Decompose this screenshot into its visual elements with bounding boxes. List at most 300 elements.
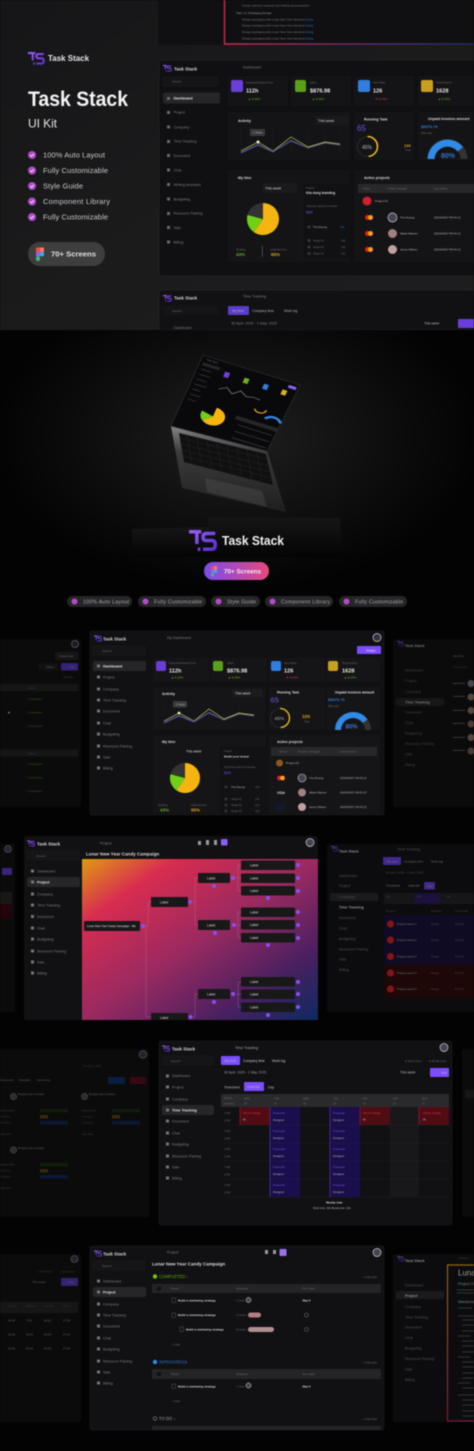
tabs: ● Break time	[429, 1059, 446, 1063]
badge: 70+ screens gradient	[204, 562, 269, 580]
mind map: Label	[207, 992, 216, 996]
sidebar: Search	[172, 80, 182, 84]
tabs: Calendar	[247, 1085, 261, 1089]
icon: logo	[28, 53, 44, 64]
card: active projects: Wade Warren	[400, 232, 418, 236]
card: my time pie: Target 02	[313, 245, 324, 249]
panel: task list screen left (dimmed): Filters	[46, 665, 54, 669]
sidebar: Budgeting	[103, 732, 120, 736]
panel: hero dashboard screen: Dashboard	[243, 66, 261, 70]
panel: task list screen left (dimmed): Completed	[28, 697, 42, 701]
sidebar: Resource Planing	[103, 744, 132, 748]
tabs: Company time	[243, 1059, 265, 1063]
panel: top document screen: Design packaging with Lunar New Year elements Doing	[242, 30, 314, 34]
card: my time pie: 14h	[341, 238, 346, 242]
panel: approvals screen left (dimmed): Company	[0, 1120, 12, 1124]
calendar grid: Financial	[333, 1183, 345, 1187]
sidebar: Dashboard	[103, 664, 123, 668]
panel: day schedule screen right (dimmed): Design	[431, 938, 440, 942]
panel: timesheet screen left (dimmed): TUE 24	[8, 1304, 17, 1308]
panel: document screen right (dimmed): Time Tracking	[405, 1316, 428, 1320]
panel: timesheet screen left (dimmed): ● Work time	[38, 1270, 52, 1274]
panel: day schedule screen right (dimmed): Project name 3	[397, 954, 417, 958]
calendar grid: Off for holiday	[363, 1111, 381, 1115]
badge: 70+ screens gradient: 70+ Screens	[224, 568, 261, 575]
task group: to do	[152, 1416, 381, 1430]
sidebar: Billing	[103, 1382, 113, 1386]
panel: hero time tracking screen: My time	[232, 309, 244, 313]
panel: approvals screen left (dimmed): Responsible	[0, 1162, 15, 1166]
calendar grid: Designer	[273, 1172, 284, 1176]
card: active projects: 2024/03/27 09:43:12	[340, 805, 367, 809]
sidebar: Budgeting	[37, 938, 54, 942]
card: my time pie: Kilo dung branding	[306, 191, 335, 195]
calendar grid: 7 AM	[224, 1183, 230, 1187]
panel: task list screen main	[90, 1246, 384, 1430]
calendar grid: Off for holiday	[423, 1111, 441, 1115]
sidebar: Task Stack	[103, 1252, 127, 1256]
card: running task: Total	[405, 148, 411, 152]
card: active projects: Project manager	[298, 750, 320, 754]
sidebar: Billing	[37, 972, 47, 976]
calendar grid: 7 AM	[224, 1111, 230, 1115]
task group: completed: May 6	[302, 1298, 311, 1302]
card: unpaid invoices gauge: 98% paid	[421, 131, 432, 135]
card: active projects: Project manager	[388, 186, 407, 190]
feature list: Fully Customizable	[43, 166, 108, 175]
panel: calendar screen right (dimmed): Choose task	[453, 665, 468, 669]
panel: task list screen left (dimmed): Status	[28, 686, 36, 690]
sidebar: Sale	[37, 960, 44, 964]
sidebar: Resource Planing	[172, 1154, 201, 1158]
stat cards: ▲ 8.25%	[438, 97, 451, 101]
panel: approvals screen left (dimmed): Document	[0, 1078, 14, 1082]
panel: day schedule screen right (dimmed): Document	[339, 916, 356, 920]
card: my time pie: Target 01	[231, 797, 242, 801]
calendar grid: Financial	[273, 1183, 285, 1187]
card: activity chart: 3 Tasks	[176, 702, 186, 706]
mind map: Label	[250, 980, 259, 984]
card: running task: Running Task	[364, 118, 388, 122]
panel: day schedule screen right (dimmed): Time Tracking	[397, 848, 420, 852]
card: activity chart: This week	[318, 119, 334, 123]
stat cards: $876.98	[227, 668, 247, 674]
sidebar: Company	[172, 1098, 188, 1102]
calendar grid: 2 PM	[224, 1118, 230, 1122]
calendar grid: Financial	[333, 1129, 345, 1133]
stat cards: 126	[284, 668, 293, 674]
card: my time pie: Target 03	[313, 252, 324, 256]
sidebar: Chat	[37, 926, 45, 930]
panel: document screen right (dimmed): Resource Planing	[405, 1357, 434, 1361]
panel: day schedule screen right (dimmed): Billing	[339, 968, 349, 972]
panel: hero time tracking screen: 30 April, 2025 - 1 May, 2025	[231, 322, 277, 326]
calendar grid: 31	[393, 1102, 396, 1106]
mind map: Label	[250, 889, 259, 893]
mind map: Label	[250, 923, 259, 927]
panel: document screen right (dimmed): Project	[459, 1256, 469, 1260]
sidebar	[93, 1252, 146, 1386]
panel: top document screen: Candy selection research and tasting documentaries	[242, 4, 310, 8]
panel: hero banner	[0, 0, 474, 330]
sidebar: Dashboard	[37, 870, 55, 874]
panel: day schedule screen right (dimmed): Project name 5	[397, 987, 417, 991]
calendar grid: 29	[333, 1102, 336, 1106]
task group: to do: + Add task	[363, 1417, 378, 1421]
card: active projects: Project 01	[286, 761, 299, 765]
calendar grid: Designer	[273, 1118, 284, 1122]
panel: calendar screen right (dimmed): Chat	[405, 721, 413, 725]
calendar grid: 2 PM	[224, 1172, 230, 1176]
calendar grid: Designer	[273, 1136, 284, 1140]
stat cards: ▲ 8.25%	[344, 676, 357, 680]
panel: mind map screen: Project	[100, 842, 111, 846]
document outline	[448, 1265, 474, 1421]
panel: approvals screen left (dimmed): Responsible	[82, 1108, 97, 1112]
task group: in progress: Name	[171, 1372, 179, 1376]
stat cards: 126	[373, 88, 382, 94]
card: my time pie: Total time spent by minutes	[224, 765, 256, 769]
calendar grid: 7 AM	[224, 1165, 230, 1169]
stat cards: ▼ 8.25%	[286, 676, 299, 680]
card: my time pie: Target 03	[231, 809, 242, 813]
card: active projects: 2024/03/27 09:43:12	[340, 776, 367, 780]
feature list: Style Guide	[43, 182, 83, 191]
panel: day schedule screen right (dimmed): Mon	[417, 894, 423, 898]
panel: timesheet screen left (dimmed): 07:00	[63, 1318, 70, 1322]
sidebar: Task Stack	[37, 842, 61, 846]
feature chips: 100% Auto Layout	[83, 600, 130, 606]
sidebar: Resource Planing	[174, 212, 203, 216]
feature chips: Fully Customizable	[355, 600, 403, 606]
task group: in progress: 1 User	[236, 1384, 245, 1388]
sidebar: Document	[174, 154, 190, 158]
panel: day schedule screen right (dimmed): Budgeting	[339, 937, 356, 941]
mind map: Label	[160, 900, 169, 904]
panel: approvals screen left (dimmed): Budget plan created	[18, 1146, 44, 1150]
stat cards: Total Projects	[436, 80, 452, 84]
sidebar: Budgeting	[172, 1142, 189, 1146]
panel: calendar screen right (dimmed): Resource Planing	[405, 742, 434, 746]
panel: day schedule screen right (dimmed): Calendar	[408, 884, 420, 888]
mind map: Label	[250, 864, 259, 868]
sidebar: Time Tracking	[172, 1108, 197, 1112]
panel: day schedule screen right (dimmed): 8:00 am	[455, 987, 464, 991]
card: unpaid invoices gauge: $6076.76	[421, 124, 438, 129]
sidebar: Chat	[103, 1336, 111, 1340]
card: unpaid invoices gauge	[327, 687, 380, 730]
panel: timesheet screen left (dimmed): WED 25	[26, 1304, 36, 1308]
panel: dashboard screen main: My Dashboard	[167, 636, 191, 640]
sidebar: Chat	[172, 1132, 180, 1136]
calendar grid: 2 PM	[224, 1154, 230, 1158]
badge: 70+ screens: 70+ Screens	[51, 250, 96, 259]
calendar grid: Off for holiday	[243, 1111, 261, 1115]
card: activity chart: This week	[235, 692, 251, 696]
panel: approvals screen left (dimmed): Budget plan created	[18, 1092, 44, 1096]
panel: laptop hero scene	[0, 330, 474, 625]
task group: in progress: Build a marketing strategy	[178, 1384, 216, 1388]
panel: day schedule screen right (dimmed): 8:00 am	[455, 971, 464, 975]
view switcher icons	[198, 839, 228, 846]
card: my time pie: Working	[236, 248, 246, 252]
sidebar: Task Stack	[172, 1046, 196, 1052]
heading: Task Stack	[28, 88, 128, 111]
stat cards: ▼ 8.25%	[375, 97, 388, 101]
stat cards: Sales	[310, 80, 317, 84]
calendar grid: FRI	[363, 1096, 367, 1100]
panel: day schedule screen right (dimmed): Timesheet	[386, 884, 400, 888]
sidebar: Time Tracking	[174, 140, 197, 144]
panel: document screen right (dimmed): Budgeting	[405, 1346, 422, 1350]
panel: hero time tracking screen: Dashboard	[174, 326, 192, 330]
panel: hero dashboard screen: Task Stack	[174, 66, 198, 72]
feature chips: Component Library	[281, 600, 330, 606]
task group: completed: COMPLETED	[159, 1274, 185, 1279]
panel: day schedule screen right (dimmed): Sale	[339, 958, 346, 962]
card: activity chart	[153, 687, 265, 730]
panel: task list screen left (dimmed): Completed	[28, 789, 42, 793]
card: active projects: Thu Duong	[400, 216, 415, 220]
calendar grid: Designer	[273, 1154, 284, 1158]
panel: document screen right (dimmed): Task Stack	[405, 1259, 425, 1263]
panel: right sliver screen (dimmed)	[462, 1049, 474, 1217]
sidebar: Company	[103, 688, 119, 692]
stat cards: Expected Worked Time	[246, 80, 273, 84]
card: my time pie: 14h	[340, 225, 345, 229]
panel: task list screen left (dimmed): Assign task	[59, 654, 74, 658]
sidebar: Project	[103, 1290, 116, 1294]
brand name: Task Stack	[222, 533, 285, 548]
panel: top document screen	[158, 0, 474, 45]
card: my time pie: 14h	[341, 245, 346, 249]
tabs: This week	[400, 1070, 416, 1074]
panel: timesheet screen left (dimmed)	[0, 1254, 81, 1422]
mind map: Label	[207, 876, 216, 880]
panel: calendar time tracking screen	[159, 1041, 452, 1225]
card: my time pie: 14h	[255, 809, 260, 813]
panel: calendar screen right (dimmed): Sale	[405, 752, 412, 756]
sidebar: Project	[37, 880, 50, 884]
card: unpaid invoices gauge: Unpaid invoices amount	[428, 117, 470, 121]
sidebar: Billing	[103, 766, 113, 770]
panel: calendar screen right (dimmed): Time Tracking	[405, 700, 430, 704]
task group: completed: Due date	[302, 1286, 315, 1290]
calendar grid: MON	[244, 1096, 250, 1100]
stat cards: 1628	[342, 668, 354, 674]
panel: calendar screen right (dimmed): Billing	[405, 763, 415, 767]
card: my time pie: Target 01	[313, 238, 324, 242]
feature chips: Style Guide	[227, 600, 256, 606]
panel: day schedule screen right (dimmed): 8:00 am	[455, 954, 464, 958]
panel: day schedule screen right (dimmed): Project	[339, 884, 350, 888]
task group: completed: Name	[171, 1286, 179, 1290]
card: active projects: Jenny Wilson	[400, 248, 418, 252]
sidebar: Time Tracking	[103, 1314, 126, 1318]
mind map: Label	[250, 992, 259, 996]
calendar grid: Financial	[333, 1165, 345, 1169]
mind map: Label	[250, 910, 259, 914]
sidebar: Budgeting	[103, 1348, 120, 1352]
card: my time pie: 65%	[191, 808, 200, 812]
heading: Lunar New Year Candy Campaign	[152, 1262, 225, 1266]
sidebar: Document	[37, 915, 54, 919]
weekly total	[313, 1200, 351, 1210]
sidebar	[163, 77, 220, 244]
panel: day schedule screen right (dimmed): Dashboard	[339, 874, 357, 878]
panel: timesheet screen left (dimmed): 07:00	[63, 1332, 70, 1336]
panel: top document screen: Design packaging with Lunar New Year elements Doing	[242, 18, 314, 22]
mind map: Label	[250, 1006, 259, 1010]
sidebar: Dashboard	[172, 1074, 190, 1078]
sidebar: Time Tracking	[103, 698, 126, 702]
panel: task list screen left (dimmed): Completed	[28, 762, 42, 766]
laptop screen: Task Stack	[206, 358, 220, 365]
feature list: Fully Customizable	[43, 213, 108, 222]
panel: timesheet screen left (dimmed): 00:00	[26, 1346, 33, 1350]
panel: day schedule screen right (dimmed): 8:00 am	[455, 922, 464, 926]
card: my time pie: Working	[158, 803, 168, 807]
calendar grid: Financial	[273, 1111, 285, 1115]
panel: timesheet screen left (dimmed): Add	[68, 1280, 73, 1284]
panel: dashboard screen main	[90, 631, 384, 815]
card: active projects	[269, 735, 380, 815]
card: my time pie: Target 02	[231, 803, 242, 807]
sidebar: Search	[171, 1059, 181, 1063]
card: running task: Total	[304, 720, 310, 724]
panel: hero time tracking screen	[159, 290, 474, 330]
panel: day schedule screen right (dimmed): Position	[431, 909, 442, 913]
sidebar: Project	[174, 110, 185, 114]
card: activity chart: Activity	[238, 119, 251, 123]
panel: approvals screen left (dimmed): Start time	[0, 1186, 12, 1190]
calendar grid: Financial	[333, 1147, 345, 1151]
calendar grid	[221, 1094, 449, 1197]
card: activity chart: 3 Tasks	[253, 130, 263, 134]
calendar grid: 8h	[423, 1118, 427, 1122]
calendar grid: 01	[422, 1102, 425, 1106]
calendar grid: Designer	[333, 1136, 344, 1140]
card: my time pie: My time	[238, 176, 251, 180]
panel: timesheet screen left (dimmed): 00:00	[8, 1332, 15, 1336]
sidebar: Dashboard	[174, 96, 194, 100]
panel: timesheet screen left (dimmed): 00:00	[8, 1318, 15, 1322]
panel: task list screen main: Project	[167, 1250, 178, 1254]
panel: day schedule screen right (dimmed): Project name 1	[397, 922, 417, 926]
panel: document screen right (dimmed): Project O	[458, 1282, 474, 1286]
sidebar: Dashboard	[103, 1280, 121, 1284]
card: my time pie: 65%	[271, 252, 280, 257]
panel: calendar screen right (dimmed): Project	[405, 679, 416, 683]
calendar grid: THU	[333, 1096, 338, 1100]
panel: top document screen: Design packaging with Lunar New Year elements Doing	[242, 24, 314, 28]
task group: completed: Build a marketing strategy	[186, 1328, 224, 1332]
panel: approvals screen left (dimmed): 30 April, 2025	[83, 1064, 102, 1068]
task group: completed: Build a marketing strategy	[178, 1298, 216, 1302]
panel: calendar time tracking screen: Time Tracking	[235, 1046, 258, 1050]
card: running task	[354, 112, 414, 160]
brand name: Task Stack	[48, 54, 90, 63]
stat cards: ▲ 8.25%	[171, 676, 184, 680]
panel: timesheet screen left (dimmed): FRI 27	[63, 1304, 71, 1308]
calendar grid: 2 PM	[224, 1190, 230, 1194]
card: my time pie: 43%	[236, 252, 245, 257]
sidebar: Sale	[174, 226, 181, 230]
subheading: UI Kit	[28, 116, 58, 130]
panel: day schedule screen right (dimmed): Work log	[431, 860, 443, 864]
panel: day schedule screen right (dimmed): My time	[387, 860, 398, 864]
sidebar: Sale	[172, 1166, 179, 1170]
sidebar	[27, 842, 80, 976]
sidebar: Billing	[172, 1176, 182, 1180]
card: active projects: 2024/03/27 09:43:12	[340, 790, 367, 794]
panel: hero time tracking screen: Work log	[284, 309, 297, 313]
card: my time pie: Build your brand	[224, 754, 249, 758]
panel: mind map screen	[24, 836, 318, 1020]
panel: day schedule screen right (dimmed): Project	[386, 909, 396, 913]
panel: document screen right (dimmed): Billing	[405, 1378, 415, 1382]
panel: table screen left sliver (dimmed)	[0, 844, 15, 1012]
task group: completed: 6 Users	[236, 1328, 247, 1332]
card: active projects: Thu Duong	[309, 776, 324, 780]
card: my time pie: Total time spent by minutes	[306, 204, 338, 208]
mind map: Label	[207, 923, 216, 927]
panel: timesheet screen left (dimmed): This week	[32, 1280, 46, 1284]
panel: day schedule screen right (dimmed): Design	[431, 987, 440, 991]
card: my time pie: Thu Duong	[231, 785, 245, 789]
panel: approvals screen left (dimmed): Company	[82, 1120, 94, 1124]
panel: document screen right (dimmed): Project	[405, 1294, 418, 1298]
card: unpaid invoices gauge: $6076.76	[328, 697, 345, 702]
card: running task: 65	[270, 696, 279, 704]
task group: in progress: INPROGRESS	[159, 1360, 187, 1364]
card: unpaid invoices gauge: 98% paid	[328, 704, 339, 708]
panel: day schedule screen right (dimmed): Resource Planing	[339, 948, 368, 952]
mind map: Label	[160, 1016, 169, 1020]
panel: day schedule screen right (dimmed): Project name 4	[397, 971, 417, 975]
card: my time pie: My time	[162, 740, 175, 744]
sidebar: Search	[36, 854, 46, 858]
stat cards: ▲ 8.25%	[228, 676, 241, 680]
tabs: ● Work time	[405, 1059, 421, 1063]
card: unpaid invoices gauge: Unpaid invoices amount	[335, 690, 375, 694]
task group: in progress	[152, 1360, 381, 1403]
sidebar: Project	[172, 1086, 183, 1090]
tabs	[221, 1056, 449, 1091]
tabs: Add	[441, 1071, 447, 1075]
panel: calendar screen right (dimmed): Dashboard	[405, 668, 423, 672]
feature chips: Fully Customizable	[154, 600, 202, 606]
sidebar: Task Stack	[103, 636, 127, 642]
calendar grid: 28	[303, 1102, 306, 1106]
sidebar	[93, 636, 146, 770]
feature list	[28, 151, 110, 222]
mind map: Lunar New Year Candy Campaign - Ma	[87, 924, 136, 928]
panel: approvals screen left (dimmed): Company	[0, 1174, 12, 1178]
card: running task: Running Task	[277, 690, 299, 694]
card: unpaid invoices gauge: 80%	[346, 724, 358, 730]
panel: approvals screen left (dimmed): Recurring	[37, 1078, 50, 1082]
card: my time pie: Thu Duong	[313, 225, 327, 229]
card: active projects: Last activity	[434, 186, 448, 190]
mind map	[82, 859, 318, 1020]
panel: day schedule screen right (dimmed): Task Stack	[339, 850, 359, 854]
calendar grid: WED	[303, 1096, 309, 1100]
panel: approvals screen left (dimmed): Start time	[0, 1132, 12, 1136]
sidebar: Sale	[103, 756, 110, 760]
panel: day schedule screen right (dimmed): Time Tracking	[339, 906, 364, 910]
card: active projects: VISA	[277, 791, 285, 795]
